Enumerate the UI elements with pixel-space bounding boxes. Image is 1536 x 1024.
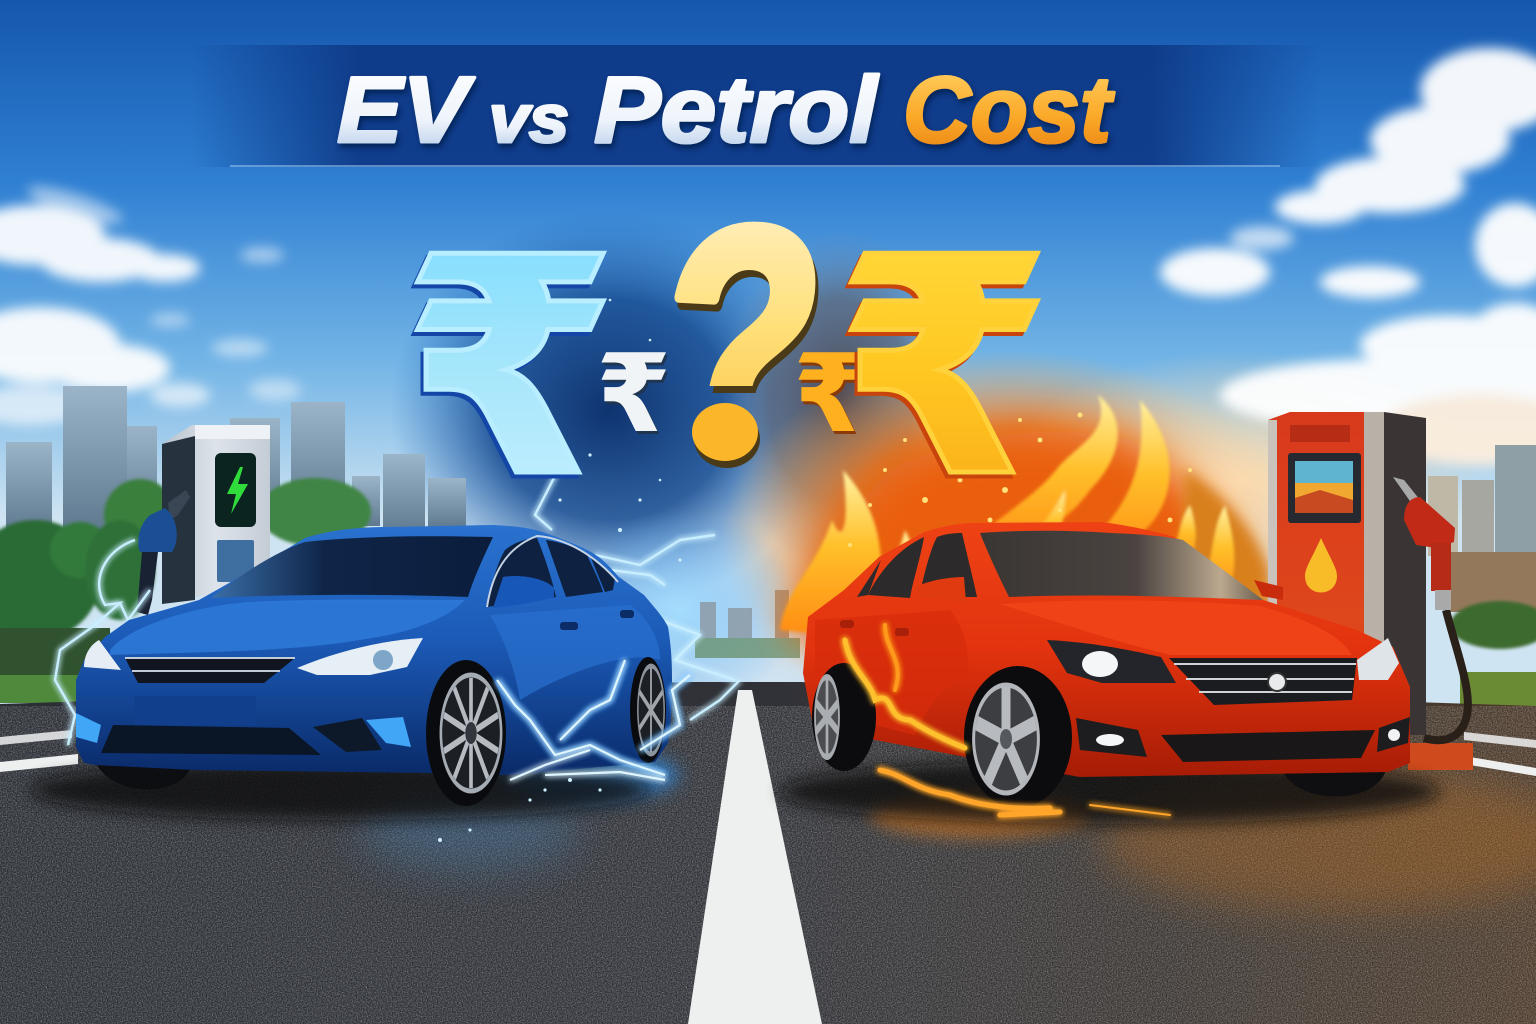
orange rupee symbol: ₹ [836, 200, 1052, 536]
title [337, 57, 1115, 162]
grille [1169, 658, 1357, 705]
rear wheel [812, 663, 876, 771]
left headlight [84, 640, 121, 670]
fuel nozzle and hose [1393, 477, 1468, 740]
front wheel [964, 666, 1072, 808]
door handles [840, 620, 909, 636]
flames on car door [845, 625, 965, 748]
city skyline left [6, 386, 466, 534]
question mark dot [692, 403, 758, 461]
road [0, 682, 1536, 1024]
blue fog lamps [76, 713, 411, 747]
small white rupee: ₹ [598, 336, 673, 457]
windshield [211, 536, 493, 598]
distant city centre [700, 590, 789, 638]
small orange rupee: ₹ [795, 336, 870, 457]
flames behind red car [780, 395, 1268, 640]
title: Cost [903, 57, 1115, 162]
rear wheel [630, 657, 666, 763]
title: EV [337, 57, 476, 162]
question mark body: ? [643, 159, 839, 528]
icon: fuel drop [1305, 538, 1337, 592]
orange rupee symbol: ₹ [833, 204, 1049, 540]
side panel highlight [490, 605, 660, 700]
hood highlight [1000, 600, 1352, 655]
red petrol car [803, 522, 1410, 808]
blue rupee symbol: ₹ [399, 204, 615, 540]
ground fire under red car [880, 770, 1170, 815]
side panel highlight [815, 610, 968, 735]
fog lamps [1076, 717, 1410, 757]
licence plate recess [134, 696, 256, 725]
petrol pump [1268, 412, 1473, 770]
mirror [915, 577, 966, 602]
title banner [190, 45, 1320, 167]
road markings [0, 690, 1536, 1024]
door handles [560, 610, 634, 630]
screen [1288, 453, 1361, 523]
side windows [487, 538, 615, 607]
blue electricity arcs [55, 440, 740, 745]
charging connector [137, 490, 190, 615]
right mirror [1254, 580, 1283, 600]
city skyline right [1428, 445, 1536, 612]
hood highlight [110, 600, 465, 655]
small orange rupee: ₹ [793, 333, 868, 454]
right front tyre [1283, 770, 1386, 797]
left front tyre [97, 765, 190, 789]
side windows [857, 533, 977, 598]
car shadows [30, 760, 1440, 824]
right headlight [297, 638, 423, 675]
question mark [674, 222, 818, 468]
lightning over blue car [438, 269, 690, 842]
blue electric car [76, 525, 672, 806]
trees and grass [0, 478, 1536, 706]
title: Petrol [594, 57, 879, 162]
icon: charger screen with green bolt [215, 453, 256, 527]
front wheel [426, 660, 506, 806]
blue rupee symbol: ₹ [402, 200, 618, 536]
window trim [487, 536, 618, 607]
EV charging station [137, 425, 270, 615]
question mark shadow: ? [646, 166, 842, 535]
mirror [493, 576, 554, 608]
windshield [980, 531, 1263, 600]
clouds: right [1160, 48, 1536, 466]
body [76, 525, 672, 775]
title: vs [489, 81, 569, 157]
vent [1290, 425, 1350, 442]
right headlight [1357, 638, 1399, 680]
body [803, 522, 1410, 777]
left headlight [1047, 640, 1176, 683]
grille [125, 658, 295, 683]
lower grille [1161, 730, 1375, 762]
clouds: left [0, 179, 301, 425]
small white rupee: ₹ [596, 333, 671, 454]
sky background [0, 0, 1536, 730]
lower bumper [101, 725, 321, 755]
